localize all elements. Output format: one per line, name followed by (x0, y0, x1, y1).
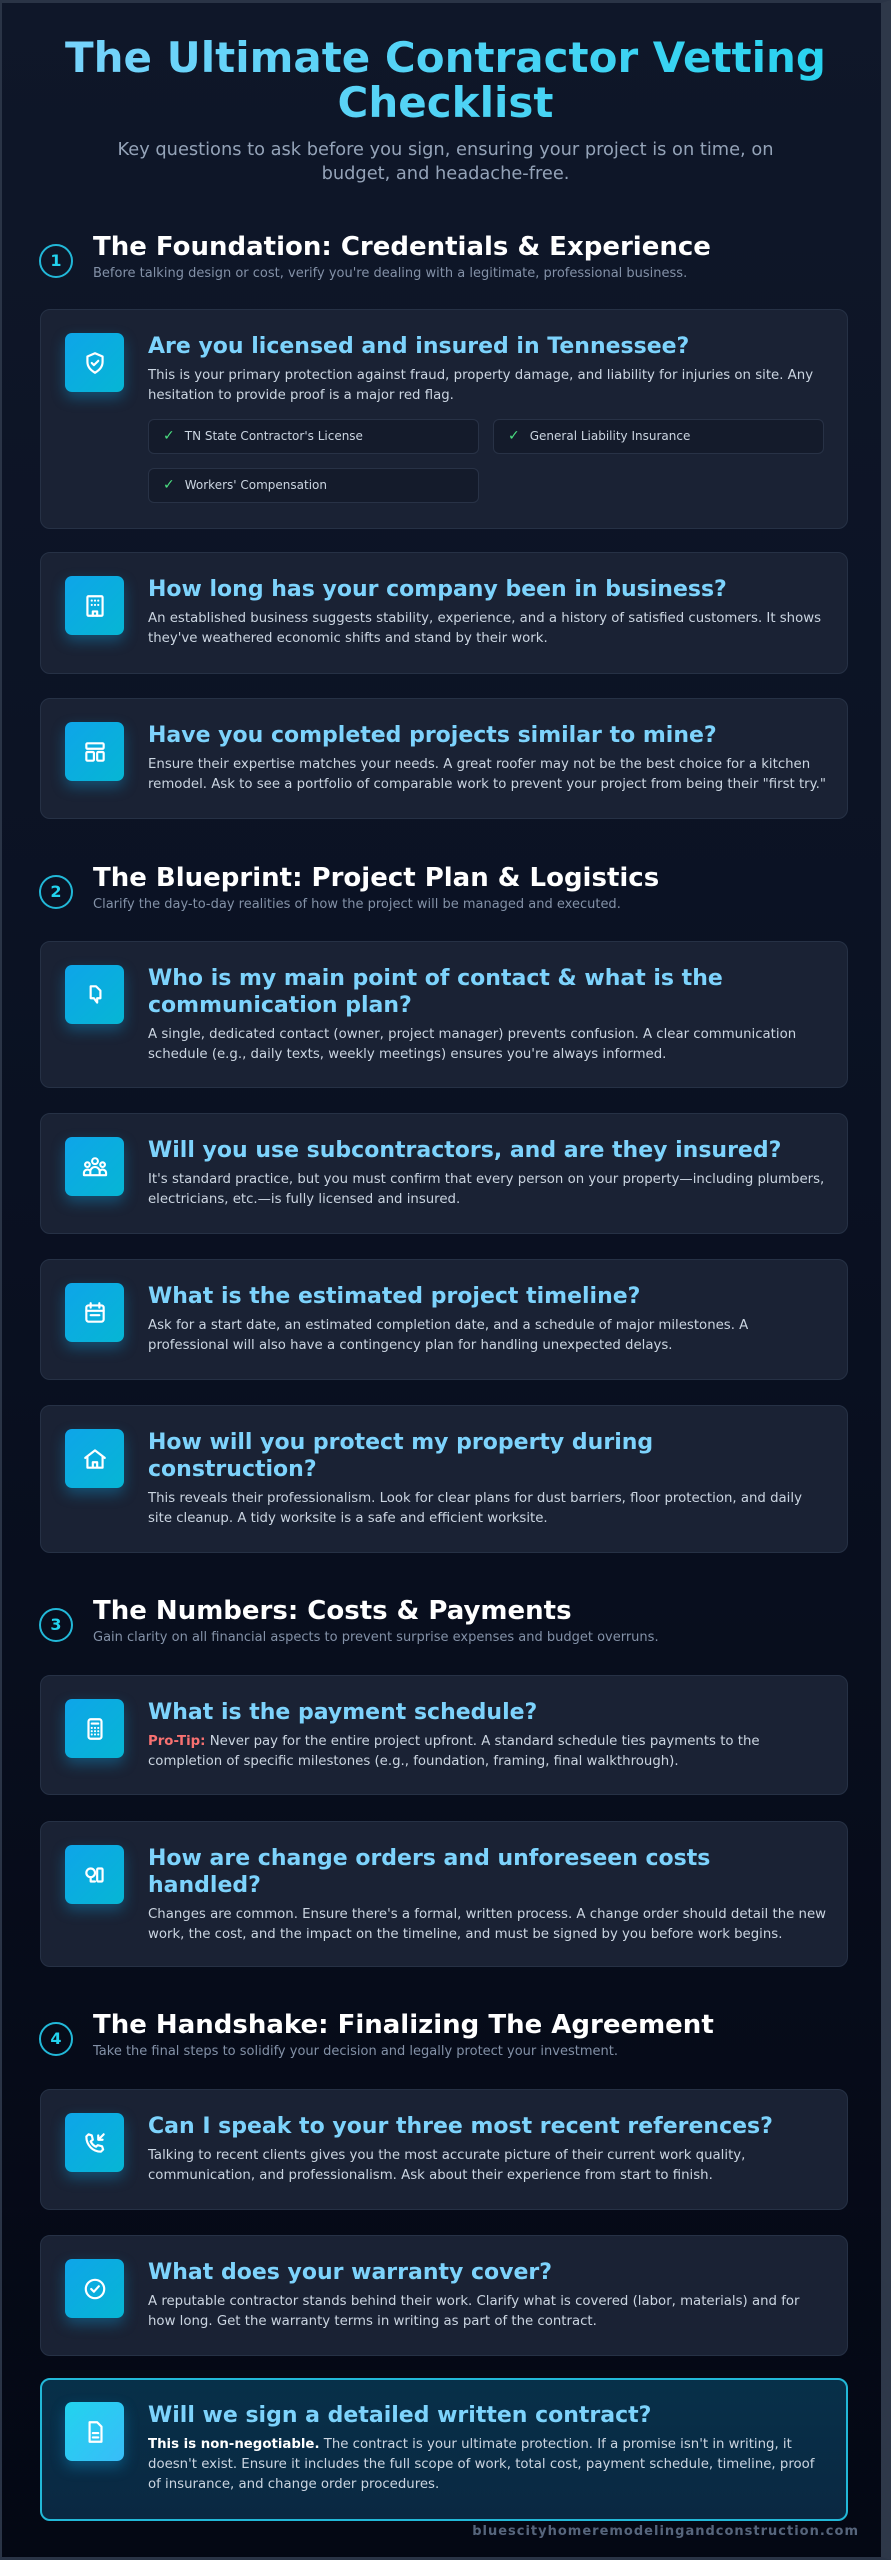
icon: check circle (65, 2259, 124, 2318)
card: timeline (40, 1259, 848, 1380)
card: subcontractors (40, 1113, 848, 1234)
card: written contract (highlight): Will we sign a detailed written contract? (148, 2403, 651, 2428)
icon: building (65, 576, 124, 635)
card: years in business (40, 552, 848, 674)
section 2 header: 2 (50, 882, 62, 901)
title: Checklist (338, 78, 553, 127)
card: protect property: How will you protect my property during construction? (148, 1430, 653, 1482)
section 4 header (39, 2010, 714, 2059)
card: warranty (40, 2235, 848, 2356)
section 2 header (39, 863, 659, 912)
card: protect property (40, 1405, 848, 1553)
checklist pills (148, 419, 824, 503)
card: warranty: A reputable contractor stands behind their work. Clarify what is covered (labor, materials) and for how long. Get the warranty terms in writing as part of the contract. (148, 2294, 799, 2329)
card: years in business: An established business suggests stability, experience, and a history of satisfied customers. It shows they've weathered economic shifts and stand by their work. (148, 611, 821, 646)
icon: shield (65, 333, 124, 392)
card: point of contact: A single, dedicated contact (owner, project manager) prevents confusion. A clear communication schedule (e.g., daily texts, weekly meetings) ensures you're always informed. (148, 1027, 796, 1062)
section 2 header: The Blueprint: Project Plan & Logistics (93, 863, 659, 893)
card: similar projects (40, 698, 848, 819)
card: licensed and insured (40, 309, 848, 529)
icon: calculator (65, 1699, 124, 1758)
icon: house (65, 1429, 124, 1488)
card: references: Talking to recent clients gives you the most accurate picture of their current work quality, communication, and professionalism. Ask about their experience from start to finish. (148, 2148, 745, 2183)
card: licensed and insured: Are you licensed and insured in Tennessee? (148, 334, 689, 359)
card: similar projects: Ensure their expertise matches your needs. A great roofer may not be the best choice for a kitchen remodel. Ask to see a portfolio of comparable work to prevent your project from being their "first try." (148, 757, 826, 792)
card: change orders (40, 1821, 848, 1967)
section 1 header: 1 (50, 251, 62, 270)
section 1 header: Before talking design or cost, verify you're dealing with a legitimate, professional business. (93, 266, 687, 281)
checklist pills: ✓ General Liability Insurance (508, 428, 690, 444)
card: similar projects: Have you completed projects similar to mine? (148, 723, 717, 748)
card: years in business: How long has your company been in business? (148, 577, 727, 602)
card: point of contact: Who is my main point of contact & what is the communication plan? (148, 966, 723, 1018)
icon: exchange (65, 1845, 124, 1904)
card: change orders: Changes are common. Ensure there's a formal, written process. A change order should detail the new work, the cost, and the impact on the timeline, and must be signed by you before work begins. (148, 1907, 826, 1942)
section 3 header: 3 (50, 1615, 62, 1634)
card: payment schedule: What is the payment schedule? (148, 1700, 537, 1725)
subtitle: Key questions to ask before you sign, ensuring your project is on time, on budget, and headache-free. (118, 139, 774, 184)
checklist pills: ✓ TN State Contractor's License (163, 428, 363, 444)
card: payment schedule: Pro-Tip: Never pay for the entire project upfront. A standard schedule ties payments to the completion of specific milestones (e.g., foundation, framing, final walkthrough). (148, 1734, 760, 1769)
card: written contract (highlight): This is non-negotiable. The contract is your ultimate protection. If a promise isn't in writing, it doesn't exist. Ensure it includes the full scope of work, total cost, payment schedule, timeline, proof of insurance, and change order procedures. (148, 2437, 814, 2492)
section 4 header: Take the final steps to solidify your decision and legally protect your investment. (93, 2044, 618, 2059)
icon: phone (65, 2113, 124, 2172)
card: timeline: What is the estimated project timeline? (148, 1284, 640, 1309)
section 3 header: The Numbers: Costs & Payments (93, 1596, 572, 1626)
checklist pills: ✓ Workers' Compensation (163, 477, 327, 493)
icon: document (65, 2402, 124, 2461)
card: change orders: How are change orders and unforeseen costs handled? (148, 1846, 710, 1898)
card: warranty: What does your warranty cover? (148, 2260, 552, 2285)
section 1 header: The Foundation: Credentials & Experience (93, 232, 711, 262)
card: payment schedule (40, 1675, 848, 1795)
icon: layout (65, 722, 124, 781)
title (2, 35, 889, 125)
card: subcontractors: Will you use subcontractors, and are they insured? (148, 1138, 781, 1163)
icon: chat (65, 965, 124, 1024)
footer url: bluescityhomeremodelingandconstruction.com (472, 2524, 859, 2539)
section 1 header (39, 232, 711, 281)
card: point of contact (40, 941, 848, 1088)
card: references: Can I speak to your three most recent references? (148, 2114, 773, 2139)
card: timeline: Ask for a start date, an estimated completion date, and a schedule of major milestones. A professional will also have a contingency plan for handling unexpected delays. (148, 1318, 748, 1353)
card: licensed and insured: This is your primary protection against fraud, property damage, and liability for injuries on site. Any hesitation to provide proof is a major red flag. (148, 368, 813, 403)
section 4 header: The Handshake: Finalizing The Agreement (93, 2010, 714, 2040)
icon: people (65, 1137, 124, 1196)
card: references (40, 2089, 848, 2210)
card: protect property: This reveals their professionalism. Look for clear plans for dust barriers, floor protection, and daily site cleanup. A tidy worksite is a safe and efficient worksite. (148, 1491, 802, 1526)
card: written contract (highlight) (40, 2378, 848, 2521)
icon: calendar (65, 1283, 124, 1342)
section 3 header (39, 1596, 659, 1645)
section 2 header: Clarify the day-to-day realities of how the project will be managed and executed. (93, 897, 621, 912)
title: The Ultimate Contractor Vetting (65, 33, 826, 82)
card: subcontractors: It's standard practice, but you must confirm that every person on your property—including plumbers, electricians, etc.—is fully licensed and insured. (148, 1172, 824, 1207)
section 4 header: 4 (50, 2029, 62, 2048)
section 3 header: Gain clarity on all financial aspects to prevent surprise expenses and budget overruns. (93, 1630, 659, 1645)
